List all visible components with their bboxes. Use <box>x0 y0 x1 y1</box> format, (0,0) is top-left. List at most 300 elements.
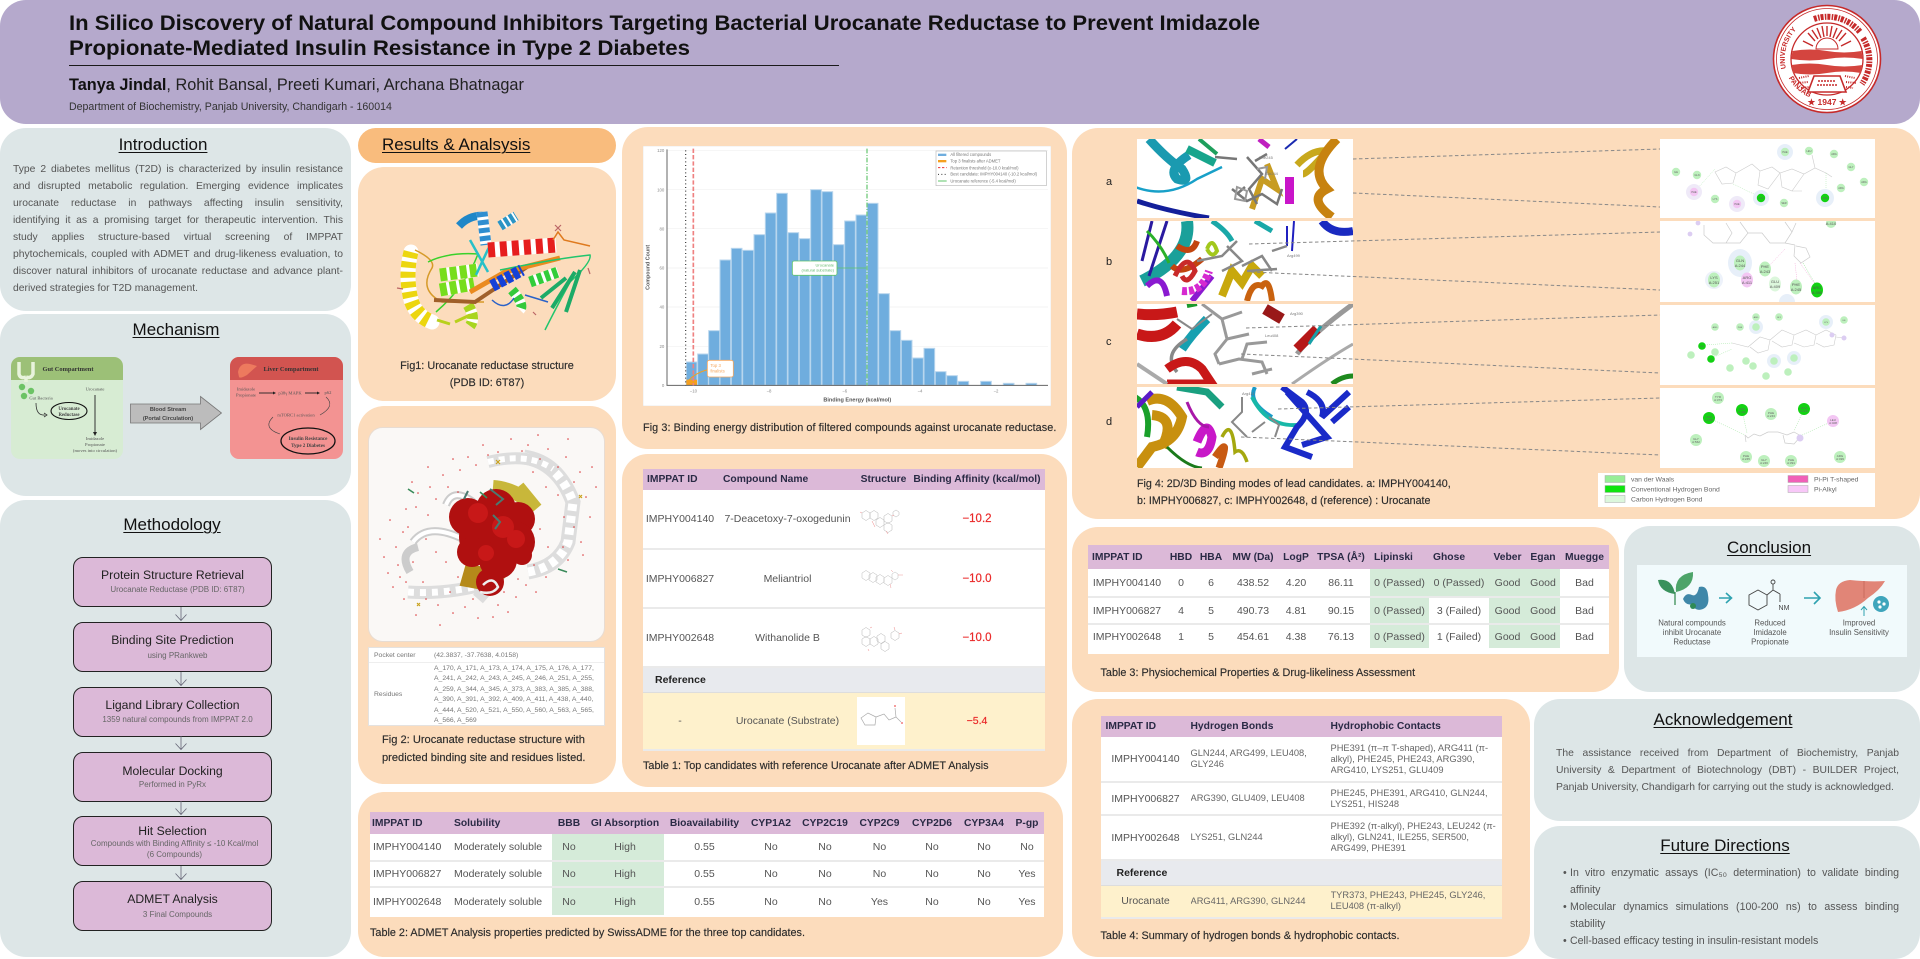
interaction legend: Pi-Alkyl <box>1814 486 1837 494</box>
table 3: physicochemical properties: Bad <box>1575 604 1594 616</box>
interaction legend: van der Waals <box>1631 476 1675 484</box>
conclusion graphic card: Natural compounds <box>1658 618 1726 628</box>
icon: plant and enzyme <box>1658 572 1708 610</box>
gut compartment: Reductase <box>58 413 80 418</box>
3D binding pose b <box>1137 221 1353 301</box>
2D interaction diagram d: A:245 <box>1742 457 1750 461</box>
table 2: ADMET properties <box>370 812 1044 917</box>
table 3: physicochemical properties: 3 (Failed) <box>1437 604 1481 616</box>
2D interaction diagram d: TYR <box>1715 395 1722 399</box>
pocket table: Pocket center <box>374 652 416 659</box>
table 2: ADMET properties: No <box>818 868 832 880</box>
table 2: ADMET properties: Solubility <box>454 818 500 828</box>
panel: future directions <box>1534 826 1920 959</box>
table 2: ADMET properties: No <box>562 868 576 880</box>
logo: Panjab University seal: UNIVERSITY <box>1780 26 1796 70</box>
table 3: physicochemical properties: IMPHY004140 <box>1093 576 1161 588</box>
chart: binding energy histogram: 80 <box>660 226 665 231</box>
liver compartment: Imidazole <box>237 386 255 392</box>
pocket table: A_566, A_569 <box>434 717 477 724</box>
2D interaction diagram d: PHE <box>1788 458 1794 462</box>
2D interaction diagram d: GLN <box>1801 406 1807 410</box>
table 4: hydrogen bonds and hydrophobic contacts: LYS251, HIS248 <box>1330 798 1399 808</box>
icon: imidazole propionate molecule <box>1749 580 1790 612</box>
arrow <box>1804 592 1820 604</box>
3D binding pose a: Gln244 <box>1265 171 1279 176</box>
table 2: ADMET properties: No <box>977 841 991 853</box>
step: binding site prediction: Binding Site Prediction <box>111 633 234 647</box>
2D interaction diagram a: GLN <box>1758 196 1764 200</box>
introduction text: Type 2 diabetes mellitus (T2D) is characterized by insulin resistance <box>13 164 343 174</box>
authors: Tanya Jindal, Rohit Bansal, Preeti Kumari, Archana Bhatnagar <box>69 76 524 94</box>
table 3: physicochemical properties: Bad <box>1575 630 1594 642</box>
table 1: top candidates <box>643 469 1045 751</box>
chart: binding energy histogram: 120 <box>657 148 665 153</box>
step: protein structure retrieval: Protein Structure Retrieval <box>101 568 244 582</box>
table 1: top candidates: Binding Affinity (kcal/mol) <box>913 474 1041 485</box>
panel: figure 4 <box>1072 128 1920 519</box>
chart: binding energy histogram: 20 <box>660 344 665 349</box>
pocket table: (42.3837, -37.7638, 4.0158) <box>434 652 518 659</box>
gut compartment: Urocanate <box>58 407 80 412</box>
liver compartment: p62 <box>325 390 332 395</box>
table 2: ADMET properties: No <box>873 841 886 853</box>
panel: future directions: • <box>1563 866 1567 878</box>
heading: Future Directions: Future Directions <box>1660 836 1790 855</box>
table 2: ADMET properties: 0.55 <box>694 868 715 880</box>
arrow: blood stream: Blood Stream <box>150 407 186 413</box>
step: protein structure retrieval <box>73 557 272 607</box>
caption: figure 1 <box>400 360 574 389</box>
callout: urocanate <box>792 261 866 275</box>
table 1: top candidates: - <box>678 715 682 727</box>
2D interaction diagram a: PHE <box>1734 202 1740 206</box>
table 3: physicochemical properties: 0 (Passed) <box>1374 604 1425 616</box>
2D interaction diagram b: A:410 <box>1826 221 1837 226</box>
arrow <box>1719 593 1732 603</box>
table 3: physicochemical properties: IMPPAT ID <box>1092 552 1143 562</box>
table 3: physicochemical properties: 4.38 <box>1286 630 1306 642</box>
gut compartment: Gut Bacteria <box>29 396 53 400</box>
arrow <box>175 672 187 686</box>
table 3: physicochemical properties: Veber <box>1493 552 1522 562</box>
table 4: hydrogen bonds and hydrophobic contacts: ARG499, PHE391 <box>1330 843 1406 853</box>
chart: binding energy histogram: −10 <box>690 388 698 393</box>
pocket table <box>368 647 605 726</box>
2D interaction diagram a <box>1660 139 1875 218</box>
2D interaction diagram a: GLN <box>1694 173 1700 177</box>
table 1: top candidates: −10.2 <box>962 513 992 525</box>
step: hit selection: Hit Selection <box>138 824 207 838</box>
2D interaction diagram d: ARG <box>1706 415 1713 419</box>
caption: figure 4 <box>1137 478 1451 507</box>
chart legend: Urocanate reference (-5.4 kcal/mol) <box>950 178 1016 183</box>
table 2: ADMET properties: 0.55 <box>694 841 715 853</box>
2D interaction diagram b: PHE <box>1792 282 1800 287</box>
chart legend: Best candidate: IMPHY004140 (-10.2 kcal/mol) <box>950 172 1038 177</box>
3D binding pose c: Leu408 <box>1265 333 1279 338</box>
introduction text: and disrupted metabolic regulation. Emerging evidence implicates <box>13 181 343 192</box>
2D interaction diagram a: ARG <box>1838 186 1844 190</box>
panel: introduction <box>0 128 351 311</box>
2D interaction diagram a: GLY <box>1848 165 1854 169</box>
table 3: physicochemical properties: 4.81 <box>1286 604 1306 616</box>
acknowledgement text: The assistance received from Department of Biochemistry, Panjab <box>1556 748 1899 758</box>
chart: binding energy histogram: 0 <box>662 383 665 388</box>
2D interaction diagram d: A:244 <box>1800 409 1808 413</box>
liver compartment: p38γ MAPK <box>278 390 302 396</box>
table 3: physicochemical properties: Muegge <box>1565 552 1604 562</box>
table 1: top candidates: IMPHY002648 <box>646 632 714 644</box>
structure: IMPHY002648 <box>862 626 902 652</box>
table 2: ADMET properties: High <box>614 841 636 853</box>
2D interaction diagram a: PHE <box>1782 150 1788 154</box>
table 2: ADMET properties: Yes <box>1018 868 1036 880</box>
label c: c <box>1106 336 1112 348</box>
table 3: physicochemical properties: Good <box>1495 576 1520 588</box>
chart legend <box>936 151 1046 186</box>
table 2: ADMET properties: No <box>818 841 832 853</box>
table 3: physicochemical properties: 454.61 <box>1237 630 1269 642</box>
2D interaction diagram b: ARG <box>1813 285 1821 290</box>
caption: figure 2: Fig 2: Urocanate reductase structure with <box>382 734 585 746</box>
2D interaction diagram b: A:251 <box>1709 280 1720 285</box>
table 3: physicochemical properties <box>1088 545 1609 654</box>
table 2: ADMET properties: No <box>764 841 778 853</box>
caption: table 1: Table 1: Top candidates with reference Urocanate after ADMET Analysis <box>643 760 989 772</box>
step: binding site prediction <box>73 622 272 672</box>
heading: Acknowledgement: Acknowledgement <box>1654 710 1792 729</box>
structure: urocanate <box>857 697 905 745</box>
caption: figure 1: (PDB ID: 6T87) <box>450 377 524 389</box>
2D interaction diagram d: A:243 <box>1767 414 1775 418</box>
introduction text: study applies structure-based virtual screening of IMPPAT <box>13 232 343 243</box>
list: future direction items: Molecular dynamics simulations (100-200 ns) to assess binding <box>1570 901 1899 913</box>
panel: table 3 <box>1072 527 1619 692</box>
introduction text: identifying it as a promising target for therapeutic intervention. This <box>13 215 343 226</box>
table 2: ADMET properties: High <box>614 896 636 908</box>
table 3: physicochemical properties: TPSA (Å²) <box>1317 552 1365 562</box>
2D interaction diagram b: GLU <box>1771 279 1779 284</box>
2D interaction diagram b: A:409 <box>1770 284 1781 289</box>
caption: figure 3: Fig 3: Binding energy distribution of filtered compounds against urocanate reductase. <box>643 422 1056 434</box>
table 3: physicochemical properties: 4.20 <box>1286 576 1306 588</box>
callout: urocanate: (natural substrate) <box>802 268 835 273</box>
step: molecular docking: Molecular Docking <box>122 764 223 778</box>
pocket table: A_444, A_520, A_521, A_550, A_560, A_563, A_565, <box>434 707 594 714</box>
table 2: ADMET properties: P-gp <box>1016 818 1038 828</box>
table 2: ADMET properties: CYP2C19 <box>802 818 848 828</box>
table 2: ADMET properties: IMPPAT ID <box>372 818 423 828</box>
table 4: hydrogen bonds and hydrophobic contacts: IMPPAT ID <box>1106 721 1156 732</box>
panel: table 4 <box>1072 699 1530 957</box>
2D interaction diagram b: PHE <box>1761 264 1769 269</box>
arrow <box>175 607 187 621</box>
2D interaction diagram c: PHE <box>1738 327 1743 329</box>
table 2: ADMET properties: No <box>977 868 991 880</box>
2D interaction diagram a: LEU <box>1806 149 1812 153</box>
table 4: hydrogen bonds and hydrophobic contacts: Urocanate <box>1121 895 1170 907</box>
3D binding pose c <box>1137 304 1353 384</box>
heading: Introduction: Introduction <box>119 135 207 154</box>
table 2: ADMET properties: No <box>925 841 939 853</box>
table 2: ADMET properties: CYP3A4 <box>964 818 1004 828</box>
introduction text: derived strategies for T2D management. <box>13 283 198 294</box>
2D interaction diagram d: GLY <box>1761 458 1767 462</box>
2D interaction diagram a: ARG <box>1822 196 1828 200</box>
2D interaction diagram a: PHE <box>1691 190 1697 194</box>
table 2: ADMET properties: IMPHY004140 <box>373 841 441 853</box>
chart legend: Retention threshold (≤-10.0 kcal/mol) <box>950 165 1019 170</box>
conclusion graphic card: Insulin Sensitivity <box>1829 628 1889 637</box>
caption: table 4: Table 4: Summary of hydrogen bonds & hydrophobic contacts. <box>1100 930 1399 942</box>
list: future direction items: stability <box>1570 918 1605 930</box>
2D interaction diagram b: ARG <box>1743 275 1751 280</box>
caption: figure 2 <box>382 734 586 764</box>
step: molecular docking: Performed in PyRx <box>139 780 206 789</box>
table 4: hydrogen bonds and hydrophobic contacts: LEU408 (π-alkyl) <box>1330 901 1401 911</box>
table 2: ADMET properties: Moderately soluble <box>454 841 542 853</box>
table 4: hydrogen bonds and hydrophobic contacts: TYR373, PHE243, PHE245, GLY246, <box>1330 890 1485 900</box>
introduction text <box>13 164 343 294</box>
table 4: hydrogen bonds and hydrophobic contacts: Hydrophobic Contacts <box>1330 721 1441 732</box>
table 1: top candidates: Structure <box>861 474 906 485</box>
table 2: ADMET properties: IMPHY002648 <box>373 896 441 908</box>
liver compartment <box>230 357 343 459</box>
table 3: physicochemical properties: 86.11 <box>1328 576 1354 588</box>
table 3: physicochemical properties: Lipinski <box>1374 552 1413 562</box>
table 1: top candidates: Compound Name <box>723 474 808 485</box>
2D interaction diagram c: LYS <box>1709 359 1714 361</box>
icon: imidazole propionate molecule: NM <box>1779 605 1790 612</box>
table 2: ADMET properties: Yes <box>871 896 888 908</box>
table 2: ADMET properties: No <box>818 896 832 908</box>
interaction legend: Conventional Hydrogen Bond <box>1631 486 1720 494</box>
table 2: ADMET properties: Bioavailability <box>670 818 739 828</box>
caption: figure 4: b: IMPHY006827, c: IMPHY002648, d (reference) : Urocanate <box>1137 495 1430 507</box>
2D interaction diagram d: A:562 <box>1692 440 1700 444</box>
gut compartment: Imidazole <box>86 436 104 441</box>
3D binding pose a: Phe245 <box>1259 155 1274 160</box>
table 3: physicochemical properties: 0 (Passed) <box>1374 630 1425 642</box>
gut compartment: Urocanate <box>86 386 104 392</box>
introduction text: urocanate reductase in pathways affecting insulin sensitivity, <box>13 198 343 209</box>
table 3: physicochemical properties: Good <box>1530 630 1556 642</box>
step: ligand library collection <box>73 687 272 737</box>
table 1: top candidates: −10.0 <box>962 572 992 584</box>
caption: table 3: Table 3: Physiochemical Properties & Drug-likeliness Assessment <box>1100 667 1415 679</box>
table 3: physicochemical properties: Good <box>1530 604 1556 616</box>
gut compartment: Gut Compartment <box>43 366 94 373</box>
panel: acknowledgement <box>1534 699 1920 821</box>
table 3: physicochemical properties: HBD <box>1170 552 1192 562</box>
logo: Panjab University seal: ★ 1947 ★ <box>1808 97 1848 107</box>
2D interaction diagram b: A:245 <box>1791 287 1802 292</box>
conclusion graphic card: Improved <box>1843 618 1875 628</box>
table 2: ADMET properties: Moderately soluble <box>454 868 542 880</box>
chart: binding energy histogram: −8 <box>767 388 772 393</box>
arrow: blood stream: (Portal Circulation) <box>143 416 193 422</box>
label b: b <box>1106 256 1112 268</box>
heading: Conclusion: Conclusion <box>1727 538 1811 557</box>
3D binding pose b: Arg499 <box>1287 253 1301 258</box>
callout: top 3 finalists: finalists <box>710 368 725 373</box>
table 4: hydrogen bonds and hydrophobic contacts: alkyl), PHE245, PHE243, ARG390, <box>1330 754 1475 764</box>
table 2: ADMET properties: CYP1A2 <box>751 818 791 828</box>
logo: Panjab University seal <box>1772 4 1882 114</box>
3D binding pose d <box>1137 387 1353 468</box>
2D interaction diagram a: ARG <box>1861 180 1867 184</box>
table 3: physicochemical properties: 4 <box>1178 604 1184 616</box>
interaction legend: Carbon Hydrogen Bond <box>1631 496 1703 504</box>
list: future direction items: In vitro enzymatic assays (IC₅₀ determination) to validate binding <box>1570 866 1899 878</box>
header banner <box>0 0 1920 124</box>
table 3: physicochemical properties: Good <box>1530 576 1556 588</box>
2D interaction diagram c: ARG <box>1754 316 1759 319</box>
caption: figure 1: Fig1: Urocanate reductase structure <box>400 360 574 372</box>
table 4: hydrogen bonds and hydrophobic contacts: Hydrogen Bonds <box>1190 721 1273 732</box>
step: hit selection: (6 Compounds) <box>147 850 202 859</box>
section banner: results and analysis <box>358 128 616 163</box>
chart: binding energy histogram: Binding Energy (kcal/mol) <box>823 398 891 404</box>
arrow: blood stream <box>130 396 222 430</box>
table 2: ADMET properties: No <box>925 868 939 880</box>
conclusion graphic card: Propionate <box>1751 638 1789 646</box>
table 3: physicochemical properties: 0 <box>1178 576 1184 588</box>
step: ADMET analysis: 3 Final Compounds <box>143 910 212 919</box>
3D binding pose d: Arg411 <box>1242 391 1255 396</box>
arrow <box>175 866 187 880</box>
2D interaction diagram d: A:246 <box>1760 461 1768 465</box>
table 3: physicochemical properties: 90.15 <box>1328 604 1354 616</box>
step: ADMET analysis: ADMET Analysis <box>127 892 218 906</box>
table 3: physicochemical properties: 0 (Passed) <box>1434 576 1484 588</box>
table 4: hydrogen bonds and hydrophobic contacts: LYS251, GLN244 <box>1190 832 1263 842</box>
2D interaction diagram d <box>1660 388 1875 468</box>
callout: urocanate: Urocanate <box>816 263 835 268</box>
2D interaction diagram b: GLN <box>1736 258 1744 263</box>
table 1: top candidates: IMPHY006827 <box>646 572 714 584</box>
acknowledgement text <box>1556 748 1899 793</box>
conclusion graphic card <box>1637 565 1907 657</box>
list: future direction items <box>1563 866 1899 947</box>
interaction legend <box>1598 473 1875 507</box>
2D interaction diagram b: A:390 <box>1812 290 1823 295</box>
table 4: hydrogen bonds and hydrophobic contacts: IMPHY002648 <box>1111 832 1180 844</box>
diagram: gut to liver mechanism <box>11 357 343 459</box>
table 3: physicochemical properties: 6 <box>1208 576 1214 588</box>
step: molecular docking <box>73 752 272 802</box>
2D interaction diagram d: A:408 <box>1829 421 1837 425</box>
table 4: hydrogen bonds and hydrophobic contacts: PHE391 (π–π T-shaped), ARG411 (π- <box>1330 742 1488 752</box>
gut compartment: (moves into circulation) <box>73 448 118 453</box>
table 1: top candidates: Meliantriol <box>764 572 811 584</box>
table 3: physicochemical properties: HBA <box>1200 552 1222 562</box>
table 2: ADMET properties: IMPHY006827 <box>373 868 441 880</box>
dashed connectors between 3D and 2D views <box>1241 148 1660 456</box>
2D interaction diagram d: A:391 <box>1787 461 1795 465</box>
2D interaction diagram a: LYS <box>1713 197 1718 201</box>
table 2: ADMET properties: BBB <box>558 818 580 828</box>
2D interaction diagram d: PHE <box>1743 454 1749 458</box>
affiliation: Department of Biochemistry, Panjab University, Chandigarh - 160014 <box>69 101 392 113</box>
table 2: ADMET properties: Yes <box>1018 896 1036 908</box>
table 1: top candidates: Reference <box>655 674 706 686</box>
table 4: hydrogen bonds and hydrophobic contacts: GLN244, ARG499, LEU408, <box>1190 748 1307 758</box>
logo: Panjab University seal: PANJAB <box>1788 76 1811 97</box>
poster title: Propionate-Mediated Insulin Resistance in Type 2 Diabetes <box>69 36 690 60</box>
2D interaction diagram b: A:411 <box>1742 280 1753 285</box>
table 3: physicochemical properties: 1 <box>1178 630 1184 642</box>
callout: top 3 finalists: Top 3 <box>710 363 722 368</box>
panel: figure 2 <box>358 406 616 784</box>
table 4: hydrogen bonds and hydrophobic contacts: alkyl), GLN241, ILE255, SER500, <box>1330 832 1469 842</box>
panel: future directions: • <box>1563 901 1567 913</box>
table 3: physicochemical properties: IMPHY002648 <box>1093 630 1161 642</box>
table 3: physicochemical properties: 5 <box>1208 604 1214 616</box>
chart: binding energy histogram: 60 <box>660 266 665 271</box>
table 3: physicochemical properties: 0 (Passed) <box>1374 576 1425 588</box>
structure: IMPHY004140 <box>860 510 900 534</box>
conclusion graphic card: Reduced <box>1754 618 1786 628</box>
table 2: ADMET properties: CYP2C9 <box>859 818 900 828</box>
table 3: physicochemical properties: MW (Da) <box>1232 552 1274 562</box>
arrow <box>175 736 187 750</box>
2D interaction diagram c: GLN <box>1700 346 1705 348</box>
table 3: physicochemical properties: Good <box>1495 630 1520 642</box>
liver compartment: Propionate <box>236 392 256 398</box>
table 3: physicochemical properties: Bad <box>1575 576 1594 588</box>
chart legend: Top 3 finalists after ADMET <box>950 159 1001 164</box>
2D interaction diagram d: A:411 <box>1738 410 1746 414</box>
caption: figure 2: predicted binding site and residues listed. <box>382 752 586 764</box>
chart: binding energy histogram: −2 <box>994 388 999 393</box>
table 4: hydrogen bonds and hydrophobic contacts: IMPHY006827 <box>1111 792 1180 804</box>
2D interaction diagram b: A:244 <box>1735 263 1746 268</box>
panel: figure 3 <box>622 127 1067 449</box>
step: binding site prediction: using PRankweb <box>147 651 208 660</box>
table 3: physicochemical properties: IMPHY006827 <box>1093 604 1161 616</box>
interaction legend: Pi-Pi T-shaped <box>1814 476 1859 484</box>
panel: mechanism <box>0 314 351 496</box>
table 3: physicochemical properties: 438.52 <box>1237 576 1269 588</box>
pocket table: A_390, A_391, A_392, A_409, A_411, A_438, A_440, <box>434 696 593 703</box>
acknowledgement text: University & Department of Biotechnology (DBT) - BUILDER Project, <box>1556 765 1899 776</box>
step: ADMET analysis <box>73 881 272 931</box>
liver compartment: Insulin Resistance <box>289 437 328 442</box>
heading: Methodology: Methodology <box>123 515 221 534</box>
panel: methodology <box>0 500 351 957</box>
2D interaction diagram d: ARG <box>1739 407 1746 411</box>
table 2: ADMET properties: No <box>977 896 991 908</box>
table 2: ADMET properties: No <box>562 841 576 853</box>
table 3: physicochemical properties: LogP <box>1283 552 1309 562</box>
table 1: top candidates: −10.0 <box>962 632 992 644</box>
step: hit selection: Compounds with Binding Affinity ≤ -10 Kcal/mol <box>91 839 258 848</box>
arrow <box>175 801 187 815</box>
2D interaction diagram a: SER <box>1781 201 1787 205</box>
table 2: ADMET properties: No <box>562 896 576 908</box>
table 3: physicochemical properties: Ghose <box>1433 552 1465 562</box>
table 2: ADMET properties: No <box>1020 841 1034 853</box>
structure: IMPHY006827 <box>862 570 903 588</box>
pocket table: A_259, A_344, A_345, A_373, A_383, A_385, A_388, <box>434 686 594 693</box>
3D binding pose a <box>1137 139 1353 218</box>
table 4: hydrogen bonds and hydrophobic contacts: Reference <box>1116 867 1167 879</box>
2D interaction diagram b <box>1660 221 1875 302</box>
caption: table 2: Table 2: ADMET Analysis properties predicted by SwissADME for the three top candidates. <box>370 927 805 939</box>
section banner: results and analysis: Results & Analsysis <box>382 135 530 154</box>
